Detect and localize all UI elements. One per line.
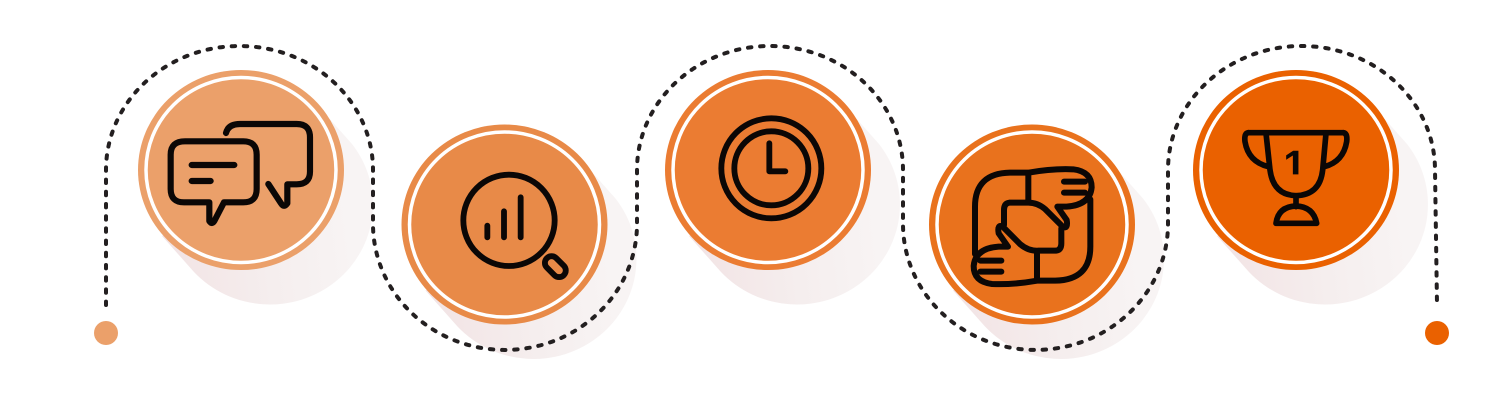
step 3: time: [665, 70, 871, 270]
shadow: step 5: [1217, 108, 1428, 304]
circle badge 3: [665, 70, 871, 270]
circle badge 2: [402, 124, 608, 324]
infographic: five step path: [94, 44, 1449, 359]
shadow: step 3: [689, 108, 900, 304]
icon: clock: [721, 118, 821, 218]
icon: trophy: 1: [1283, 142, 1306, 188]
circle badge 4: [929, 124, 1135, 324]
end dot: [1425, 321, 1449, 345]
shadow: step 1: [162, 108, 373, 304]
shadow: step 4: [953, 162, 1164, 359]
step 5: achievement: [1193, 70, 1399, 270]
icon: clasped hands: [974, 169, 1092, 284]
icon: speech bubbles: [171, 124, 310, 223]
start dot: [94, 321, 118, 345]
shadow: step 2: [426, 162, 636, 359]
step 4: teamwork: [929, 124, 1135, 324]
circle badge 5: [1193, 70, 1399, 270]
step 1: conversation: [138, 70, 344, 270]
icon: trophy: [1245, 133, 1347, 223]
circle badge 1: [138, 70, 344, 270]
dashed connector path: [106, 46, 1437, 350]
long shadows behind circles: [162, 108, 1428, 359]
icon: magnifier with bars: [463, 175, 569, 280]
step 2: analysis: [402, 124, 608, 324]
